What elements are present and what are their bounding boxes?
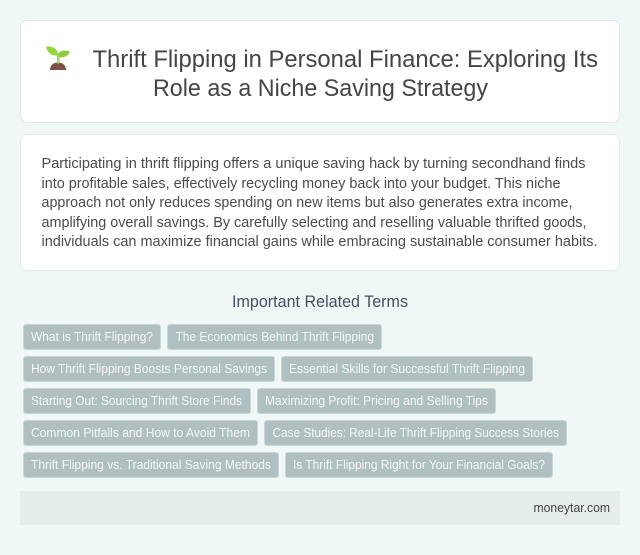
tag xyxy=(258,388,496,414)
tag: Maximizing Profit: Pricing and Selling Tips xyxy=(265,394,488,408)
tag: Is Thrift Flipping Right for Your Financial Goals? xyxy=(293,458,545,472)
heading: important related terms: Important Related Terms xyxy=(232,293,408,311)
panel: summary paragraph xyxy=(20,134,620,270)
text block: summary: Participating in thrift flipping offers a unique saving hack by turning secondhand finds xyxy=(42,156,586,172)
tag xyxy=(168,324,382,350)
panel: related term tags xyxy=(24,324,566,478)
tag xyxy=(264,420,566,446)
title: Role as a Niche Saving Strategy xyxy=(153,75,488,102)
tag xyxy=(24,356,274,382)
tag: Starting Out: Sourcing Thrift Store Finds xyxy=(31,394,242,408)
text block: summary xyxy=(42,156,598,250)
tag: What is Thrift Flipping? xyxy=(31,330,153,344)
tag: Common Pitfalls and How to Avoid Them xyxy=(31,426,250,440)
tag xyxy=(286,452,552,478)
text block: summary: into profitable sales, effectively recycling money back into your budget. This niche xyxy=(42,176,560,192)
tag: Thrift Flipping vs. Traditional Saving Methods xyxy=(31,458,271,472)
panel: title header xyxy=(20,20,620,122)
tag xyxy=(24,420,258,446)
text block: summary: approach not only reduces spending on new items but also generates extra income, xyxy=(42,195,572,211)
tag: The Economics Behind Thrift Flipping xyxy=(176,330,374,344)
title xyxy=(92,46,598,102)
tag xyxy=(282,356,532,382)
footer: moneytar.com xyxy=(534,500,610,515)
tag: Case Studies: Real-Life Thrift Flipping Success Stories xyxy=(272,426,559,440)
tag xyxy=(24,388,250,414)
text block: summary: amplifying overall savings. By carefully selecting and reselling valuable thrifted goods, xyxy=(42,215,586,231)
footer xyxy=(20,491,620,525)
tag xyxy=(24,452,278,478)
tag xyxy=(24,324,160,350)
title: Thrift Flipping in Personal Finance: Exploring Its xyxy=(92,46,598,73)
tag: Essential Skills for Successful Thrift Flipping xyxy=(289,362,525,376)
text block: summary: individuals can maximize financial gains while embracing sustainable consumer habits. xyxy=(42,234,598,250)
icon: seedling xyxy=(46,46,70,70)
tag: How Thrift Flipping Boosts Personal Savings xyxy=(31,362,267,376)
